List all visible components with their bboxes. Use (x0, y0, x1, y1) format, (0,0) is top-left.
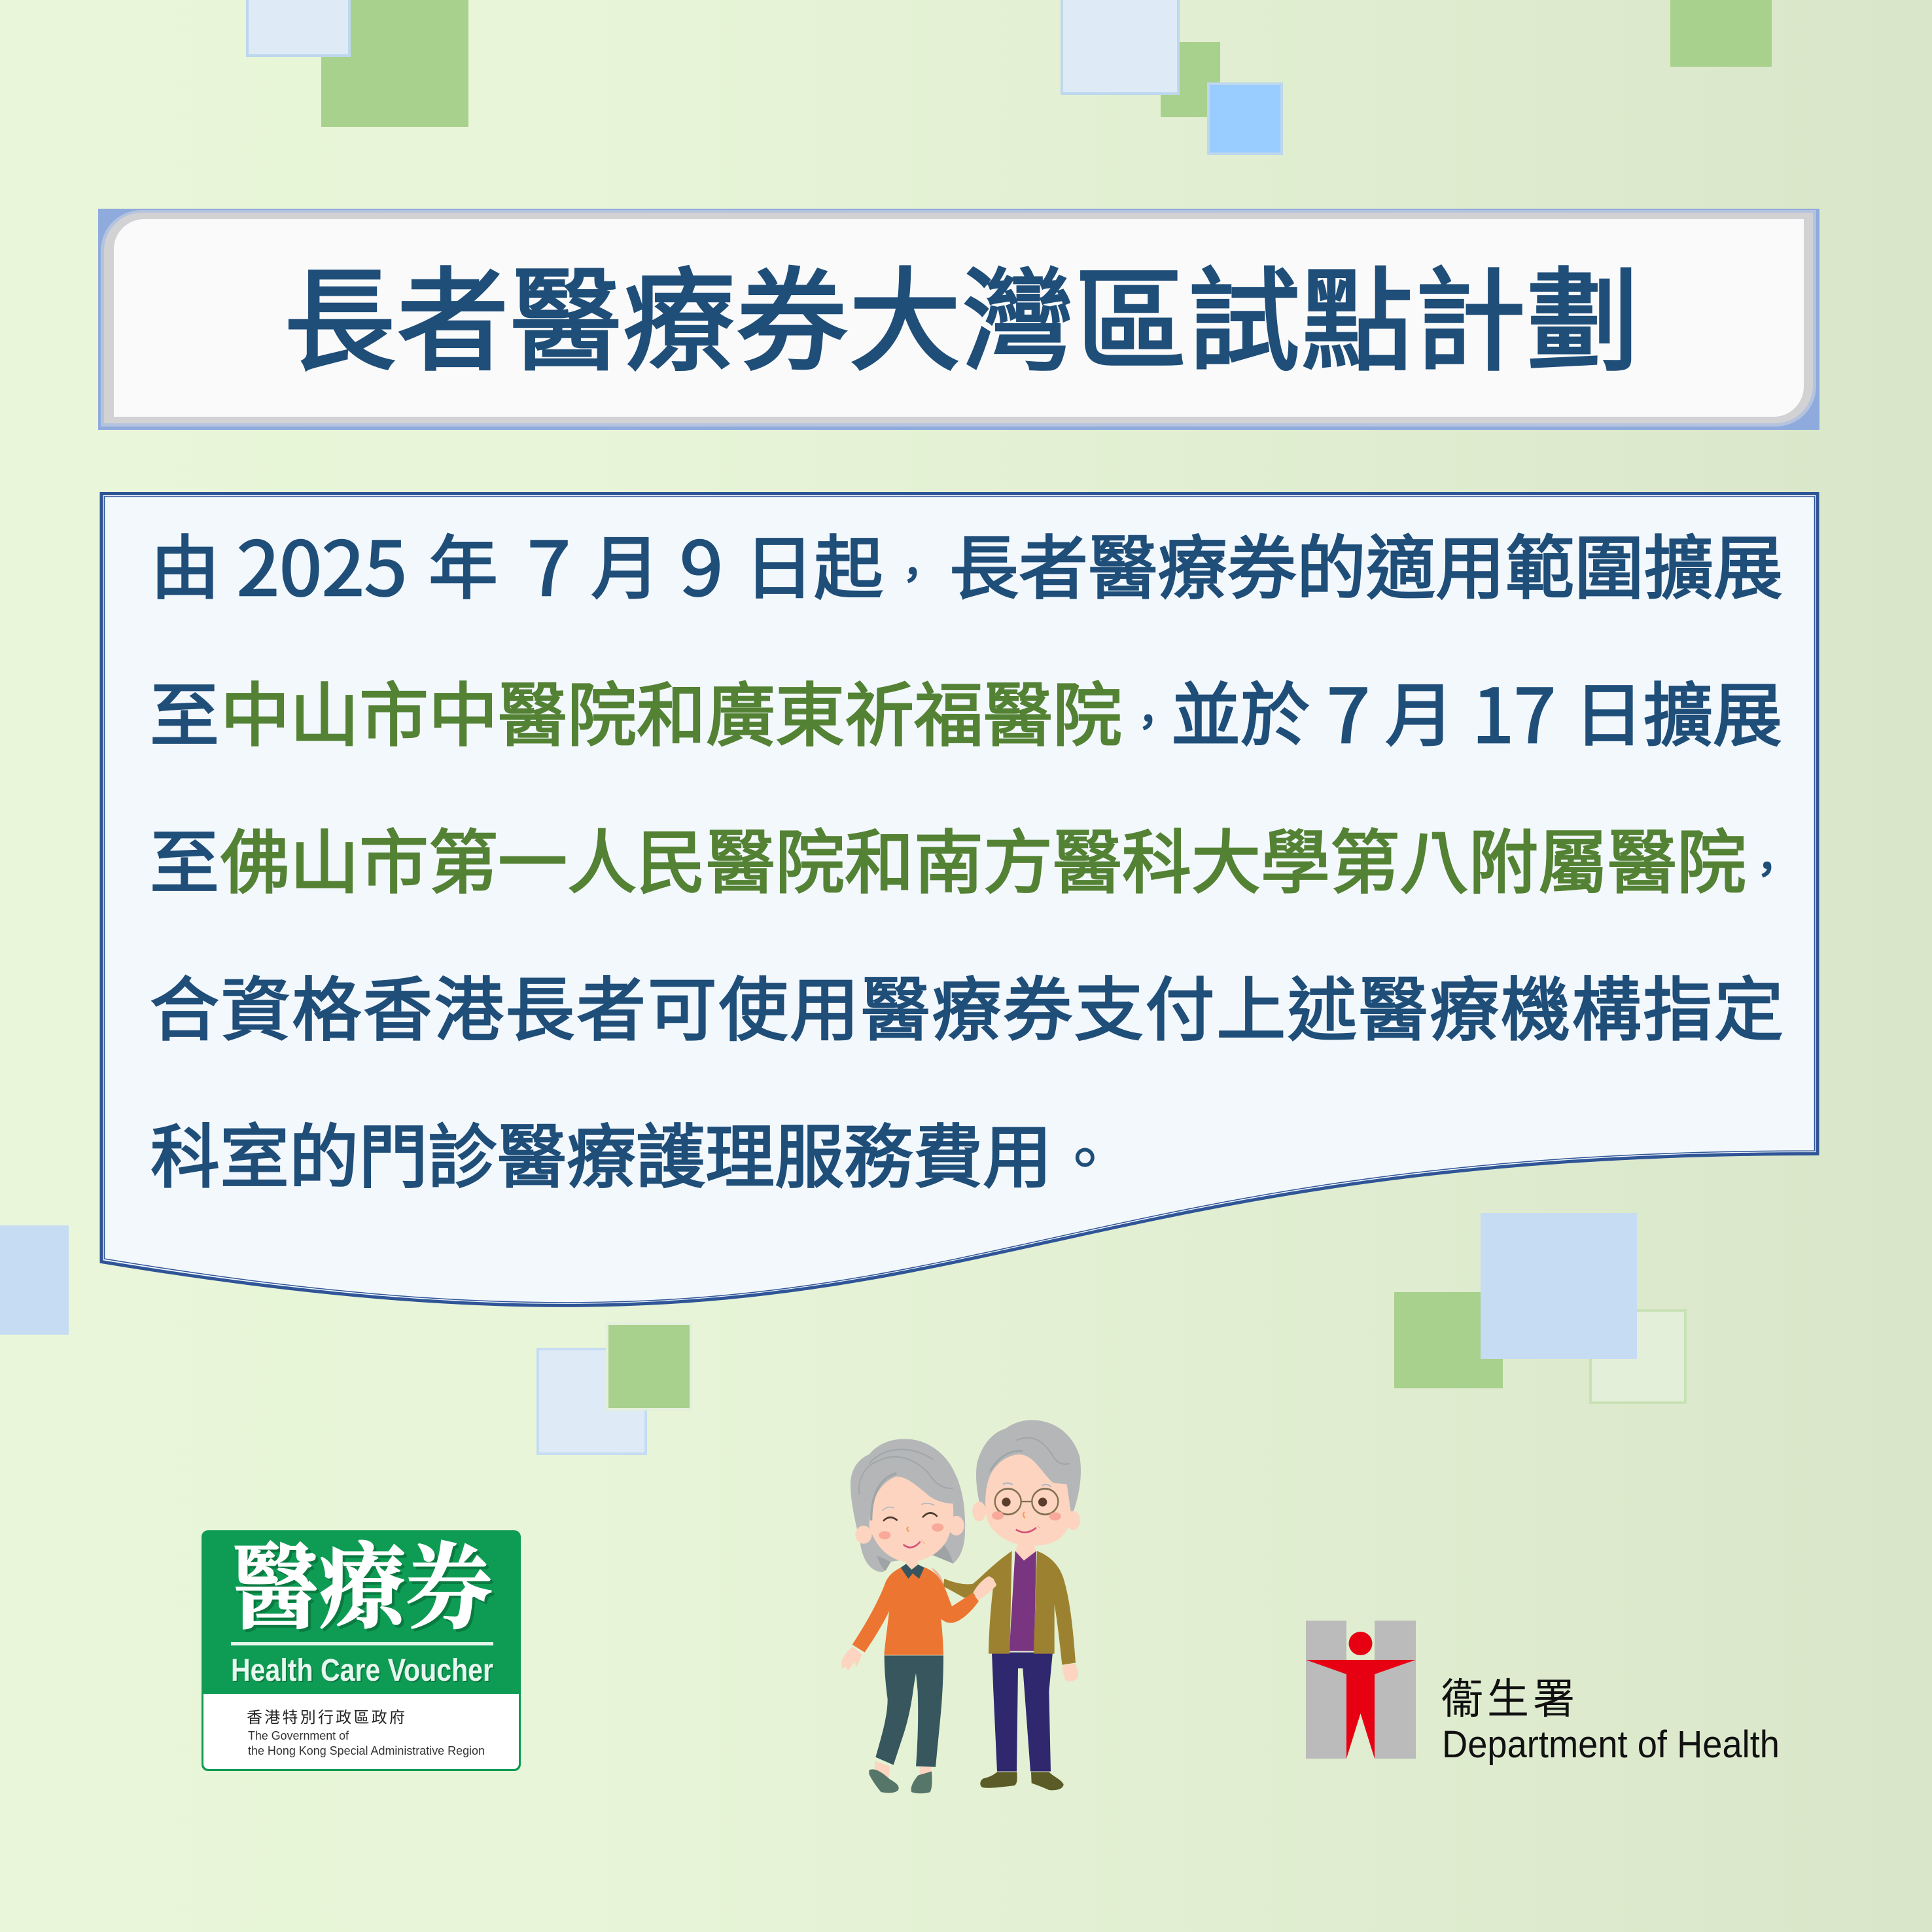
decorative squares: lower right (1394, 1213, 1685, 1403)
decorative square: top right (1670, 0, 1772, 67)
body text line 2 (150, 656, 1782, 764)
logo: Health Care Voucher (202, 1513, 521, 1771)
body text line 1: ， (891, 541, 934, 603)
DH English name: Department of Health (1442, 1723, 1780, 1766)
decorative squares: below panel (538, 1324, 691, 1454)
logo English name: Health Care Voucher (232, 1655, 495, 1689)
body text line 1 (150, 509, 1783, 617)
body text line 1: 月 (591, 512, 660, 613)
logo English name: Health Care Voucher (231, 1653, 493, 1688)
body text line 1: 長者醫療券的適用範圍擴展 (949, 512, 1783, 613)
logo title: 醫療券 (232, 1513, 493, 1647)
decorative square: left edge (0, 1225, 69, 1335)
man (943, 1420, 1081, 1790)
decorative squares: top left (247, 0, 468, 127)
body text line 1: 日起 (745, 512, 883, 613)
logo: Department of Health (1306, 1621, 1780, 1766)
body text line 2: 日擴展 (1574, 659, 1782, 760)
body text line 2: 至 (150, 659, 219, 760)
logo government name: 香港特別行政區政府 (247, 1704, 405, 1727)
body text line 1: 9 (680, 509, 723, 617)
body text line 2: 7 (1327, 656, 1370, 764)
body text line 3: ， (1746, 835, 1788, 897)
body text line 3: 佛山市第一人民醫院和南方醫科大學第八附屬醫院 (220, 807, 1746, 907)
decorative squares: top centre (1062, 0, 1282, 154)
body text line 3: 至 (150, 807, 219, 907)
body text line 1: 由 (150, 512, 220, 613)
body text line 5: 。 (1055, 1111, 1115, 1198)
body text line 2: 月 (1385, 659, 1454, 760)
body panel (101, 493, 1818, 1305)
body text line 5: 科室的門診醫療護理服務費用 (150, 1101, 1052, 1202)
body text line 1: 年 (429, 512, 498, 613)
DH emblem (1306, 1621, 1416, 1759)
body text line 2: 並於 (1171, 659, 1310, 760)
body text line 2: 17 (1472, 656, 1556, 764)
body text line 2: ， (1127, 688, 1169, 750)
logo: Health Care Voucher: The Government of (248, 1729, 349, 1742)
body text line 1: 2025 (237, 509, 407, 617)
logo: Health Care Voucher: the Hong Kong Special Administrative Region (248, 1744, 485, 1757)
body text line 4: 合資格香港長者可使用醫療券支付上述醫療機構指定 (150, 954, 1783, 1055)
title text: 長者醫療券大灣區試點計劃 (284, 232, 1639, 393)
body text line 2: 中山市中醫院和廣東祈福醫院 (220, 659, 1122, 760)
logo title: 醫療券 (235, 1516, 495, 1649)
illustration: elderly couple (841, 1420, 1081, 1793)
title plaque (98, 209, 1819, 430)
DH Chinese name: 衞生署 (1441, 1666, 1575, 1726)
body text line 1: 7 (527, 509, 571, 617)
woman (841, 1439, 996, 1793)
